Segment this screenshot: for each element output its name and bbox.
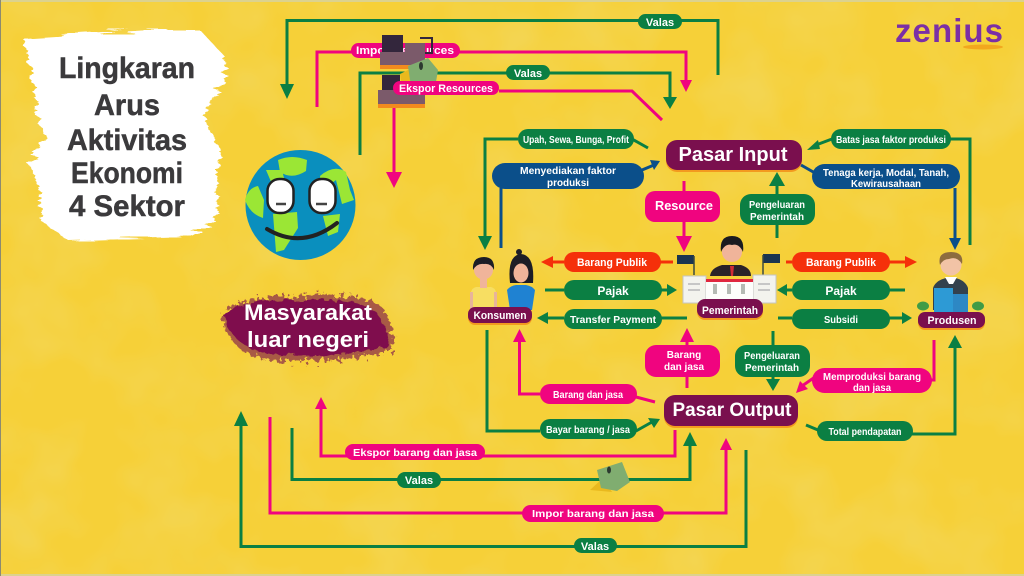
flow: Memproduksi barang dan jasa: Memproduksi barang <box>823 372 921 383</box>
flow: Pengeluaran Pemerintah top <box>740 172 815 238</box>
flow: Pengeluaran Pemerintah bottom <box>735 331 810 391</box>
flow: Total pendapatan: Total pendapatan <box>828 427 902 438</box>
flow: Pajak left <box>545 280 677 300</box>
flow: Pengeluaran Pemerintah top: Pemerintah <box>750 212 804 223</box>
flow: Tenaga kerja: Kewirausahaan <box>851 179 921 190</box>
node: Pasar Output: Pasar Output <box>672 400 792 421</box>
flow: Resource <box>645 181 720 252</box>
logo: zenius: zenius <box>895 12 1003 49</box>
flow: Valas top outer <box>280 14 718 99</box>
flow: Valas top outer: Valas <box>646 17 674 29</box>
flow: Bayar barang / jasa <box>487 330 660 439</box>
flow: Pengeluaran Pemerintah bottom: Pengeluaran <box>744 351 800 362</box>
label: Produsen <box>918 312 985 330</box>
flow: Pengeluaran Pemerintah bottom: Pemerintah <box>745 363 799 374</box>
flow: Pajak left: Pajak <box>597 284 629 298</box>
flow: Memproduksi barang dan jasa: dan jasa <box>853 383 891 394</box>
flow: Ekspor Resources: Ekspor Resources <box>399 83 493 95</box>
label: Konsumen: Konsumen <box>474 310 527 322</box>
flow: Total pendapatan <box>806 335 962 441</box>
flow: Valas bottom inner <box>292 428 697 488</box>
flow: Subsidi <box>778 309 912 329</box>
label: Pemerintah: Pemerintah <box>702 305 758 317</box>
label: Masyarakat luar negeri: Masyarakat <box>244 300 373 325</box>
flow: Ekspor Resources <box>386 81 662 188</box>
icon: government building <box>677 236 780 303</box>
title: Arus <box>94 89 160 122</box>
title: 4 Sektor <box>69 190 185 223</box>
flow: Barang Publik left <box>541 252 673 272</box>
flow: Upah, Sewa, Bunga, Profit <box>478 129 648 250</box>
node: Pasar Input <box>666 140 802 172</box>
flow: Impor Resources <box>317 43 692 107</box>
flow: Valas inner: Valas <box>514 68 542 80</box>
flow: Barang dan jasa up <box>645 328 720 388</box>
icon: konsumen people <box>470 249 535 310</box>
icon: machines <box>378 35 432 108</box>
flow: Tenaga kerja: Tenaga kerja, Modal, Tanah, <box>823 168 949 179</box>
flow: Valas bottom inner: Valas <box>405 475 433 487</box>
title: Ekonomi <box>71 157 183 190</box>
flow: Impor barang dan jasa <box>270 417 732 522</box>
icon: money stack bottom <box>590 462 630 492</box>
label: Masyarakat luar negeri: luar negeri <box>247 327 369 352</box>
icon: money stack top <box>400 58 438 90</box>
flow: Resource: Resource <box>655 198 713 213</box>
flow: Bayar barang / jasa: Bayar barang / jasa <box>546 425 630 436</box>
flow: Ekspor barang dan jasa <box>315 397 675 460</box>
node: Pasar Input: Pasar Input <box>678 144 788 166</box>
icon: produsen businessman <box>917 252 984 312</box>
flow: Batas jasa faktor produksi: Batas jasa faktor produksi <box>836 135 946 146</box>
flow: Transfer Payment <box>537 309 687 329</box>
flow: Menyediakan faktor produksi: Menyediakan faktor <box>520 166 616 177</box>
flow: Ekspor barang dan jasa: Ekspor barang dan jasa <box>353 448 477 459</box>
flow: Barang dan jasa up: Barang <box>667 350 701 361</box>
flow: Upah, Sewa, Bunga, Profit: Upah, Sewa, Bunga, Profit <box>523 135 630 146</box>
flow: Menyediakan faktor produksi: produksi <box>547 178 589 189</box>
title <box>24 30 226 240</box>
flow: Pajak right: Pajak <box>825 284 857 298</box>
flow: Barang dan jasa up: dan jasa <box>664 362 704 373</box>
icon: smiling globe <box>245 150 356 260</box>
label: Konsumen <box>468 307 532 325</box>
flow: Valas inner <box>360 65 677 155</box>
flow: Pajak right <box>777 280 905 300</box>
flow: Barang Publik right: Barang Publik <box>806 257 877 269</box>
flow: Valas bottom outer: Valas <box>581 541 609 553</box>
flow: Impor barang dan jasa: Impor barang dan jasa <box>532 509 654 520</box>
label: Produsen: Produsen <box>928 315 977 327</box>
flow: Valas bottom outer <box>234 411 746 553</box>
flow: Impor Resources: Impor Resources <box>356 45 454 57</box>
flow: Tenaga kerja <box>801 164 961 250</box>
title: Aktivitas <box>67 124 187 157</box>
title: Lingkaran <box>59 52 195 85</box>
flow: Batas jasa faktor produksi <box>807 129 970 245</box>
flow: Barang dan jasa to Konsumen <box>513 329 655 404</box>
label: Masyarakat luar negeri <box>222 295 393 361</box>
flow: Pengeluaran Pemerintah top: Pengeluaran <box>749 200 805 211</box>
flow: Barang dan jasa to Konsumen: Barang dan jasa <box>553 390 623 401</box>
flow: Memproduksi barang dan jasa <box>796 340 934 394</box>
label: Pemerintah <box>697 299 763 320</box>
flow: Barang Publik left: Barang Publik <box>577 257 648 269</box>
flow: Barang Publik right <box>786 252 917 272</box>
node: Pasar Output <box>664 395 798 428</box>
flow: Menyediakan faktor produksi <box>492 160 660 248</box>
flow: Transfer Payment: Transfer Payment <box>570 315 657 326</box>
flow: Subsidi: Subsidi <box>824 315 858 326</box>
